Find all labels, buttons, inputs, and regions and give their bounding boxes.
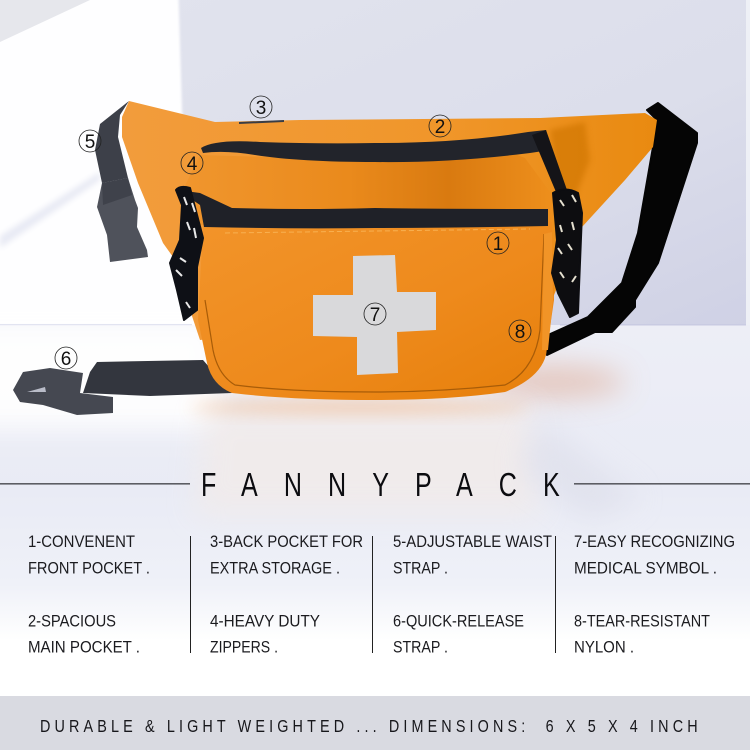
feature column 2: EXTRA STORAGE . bbox=[210, 558, 340, 578]
feature column 3: 6-QUICK-RELEASE bbox=[393, 612, 524, 630]
callout 8 bbox=[509, 320, 531, 343]
fanny pack photo illustration bbox=[13, 101, 697, 415]
callout 5: 5 bbox=[85, 132, 95, 153]
callout 7 bbox=[364, 303, 386, 326]
right wing shadow bbox=[550, 122, 590, 205]
icon: left adjustable strap and buckle bbox=[95, 101, 148, 262]
feature column 3: STRAP . bbox=[393, 558, 448, 578]
callout 5 bbox=[79, 130, 101, 153]
front pocket bbox=[198, 222, 554, 400]
callout 3: 3 bbox=[256, 98, 266, 119]
title with rules: FANNYPACK bbox=[201, 467, 560, 504]
feature column 1 bbox=[28, 532, 150, 656]
feature column 2: 3-BACK POCKET FOR bbox=[210, 532, 363, 551]
callout 1: 1 bbox=[493, 234, 503, 255]
callout 2: 2 bbox=[435, 117, 445, 138]
feature column 2: ZIPPERS . bbox=[210, 638, 278, 656]
feature column 3: 5-ADJUSTABLE WAIST bbox=[393, 532, 552, 551]
callout 8: 8 bbox=[515, 322, 525, 343]
icon: quick-release strap and buckle bbox=[13, 360, 232, 415]
icon: left zipper cord bbox=[170, 187, 203, 320]
right pocket side seam bbox=[542, 232, 553, 350]
callout 4 bbox=[181, 152, 203, 175]
footer band bbox=[0, 696, 750, 750]
feature column 4: NYLON . bbox=[574, 638, 634, 656]
table surface and reflection bbox=[0, 318, 750, 696]
feature column 1: 1-CONVENENT bbox=[28, 532, 135, 551]
front pocket seam bbox=[205, 234, 544, 392]
stitching bbox=[225, 229, 530, 233]
callout 6 bbox=[55, 347, 77, 370]
callout 7: 7 bbox=[370, 305, 380, 326]
footer band: DURABLE & LIGHT WEIGHTED ... DIMENSIONS: 6 X 5 X 4 INCH bbox=[40, 717, 698, 736]
feature column 4: 8-TEAR-RESISTANT bbox=[574, 612, 710, 630]
numbered callouts bbox=[55, 96, 531, 370]
icon: right zipper cord bbox=[552, 190, 582, 317]
back body of bag bbox=[122, 101, 657, 340]
feature column 1: FRONT POCKET . bbox=[28, 558, 150, 578]
feature column 3 bbox=[393, 532, 552, 656]
feature column 2 bbox=[210, 532, 363, 656]
icon: right waist strap bbox=[547, 103, 697, 355]
feature column 4 bbox=[574, 532, 735, 656]
callout 4: 4 bbox=[187, 154, 198, 175]
top zipper bbox=[201, 130, 550, 162]
callout 2 bbox=[429, 115, 451, 138]
feature column 4: MEDICAL SYMBOL . bbox=[574, 558, 717, 578]
callout 6: 6 bbox=[61, 349, 71, 370]
feature column 2: 4-HEAVY DUTY bbox=[210, 612, 320, 630]
icon: white medical cross bbox=[313, 255, 436, 375]
feature column 1: MAIN POCKET . bbox=[28, 638, 140, 656]
middle pocket bbox=[180, 152, 553, 225]
wall background bbox=[0, 0, 750, 345]
zipper pull bbox=[532, 130, 567, 192]
feature column 1: 2-SPACIOUS bbox=[28, 612, 116, 630]
callout 1 bbox=[487, 232, 509, 255]
front zipper bbox=[178, 190, 548, 228]
back pocket slit bbox=[239, 120, 284, 124]
feature column 3: STRAP . bbox=[393, 638, 448, 656]
callout 3 bbox=[250, 96, 272, 119]
